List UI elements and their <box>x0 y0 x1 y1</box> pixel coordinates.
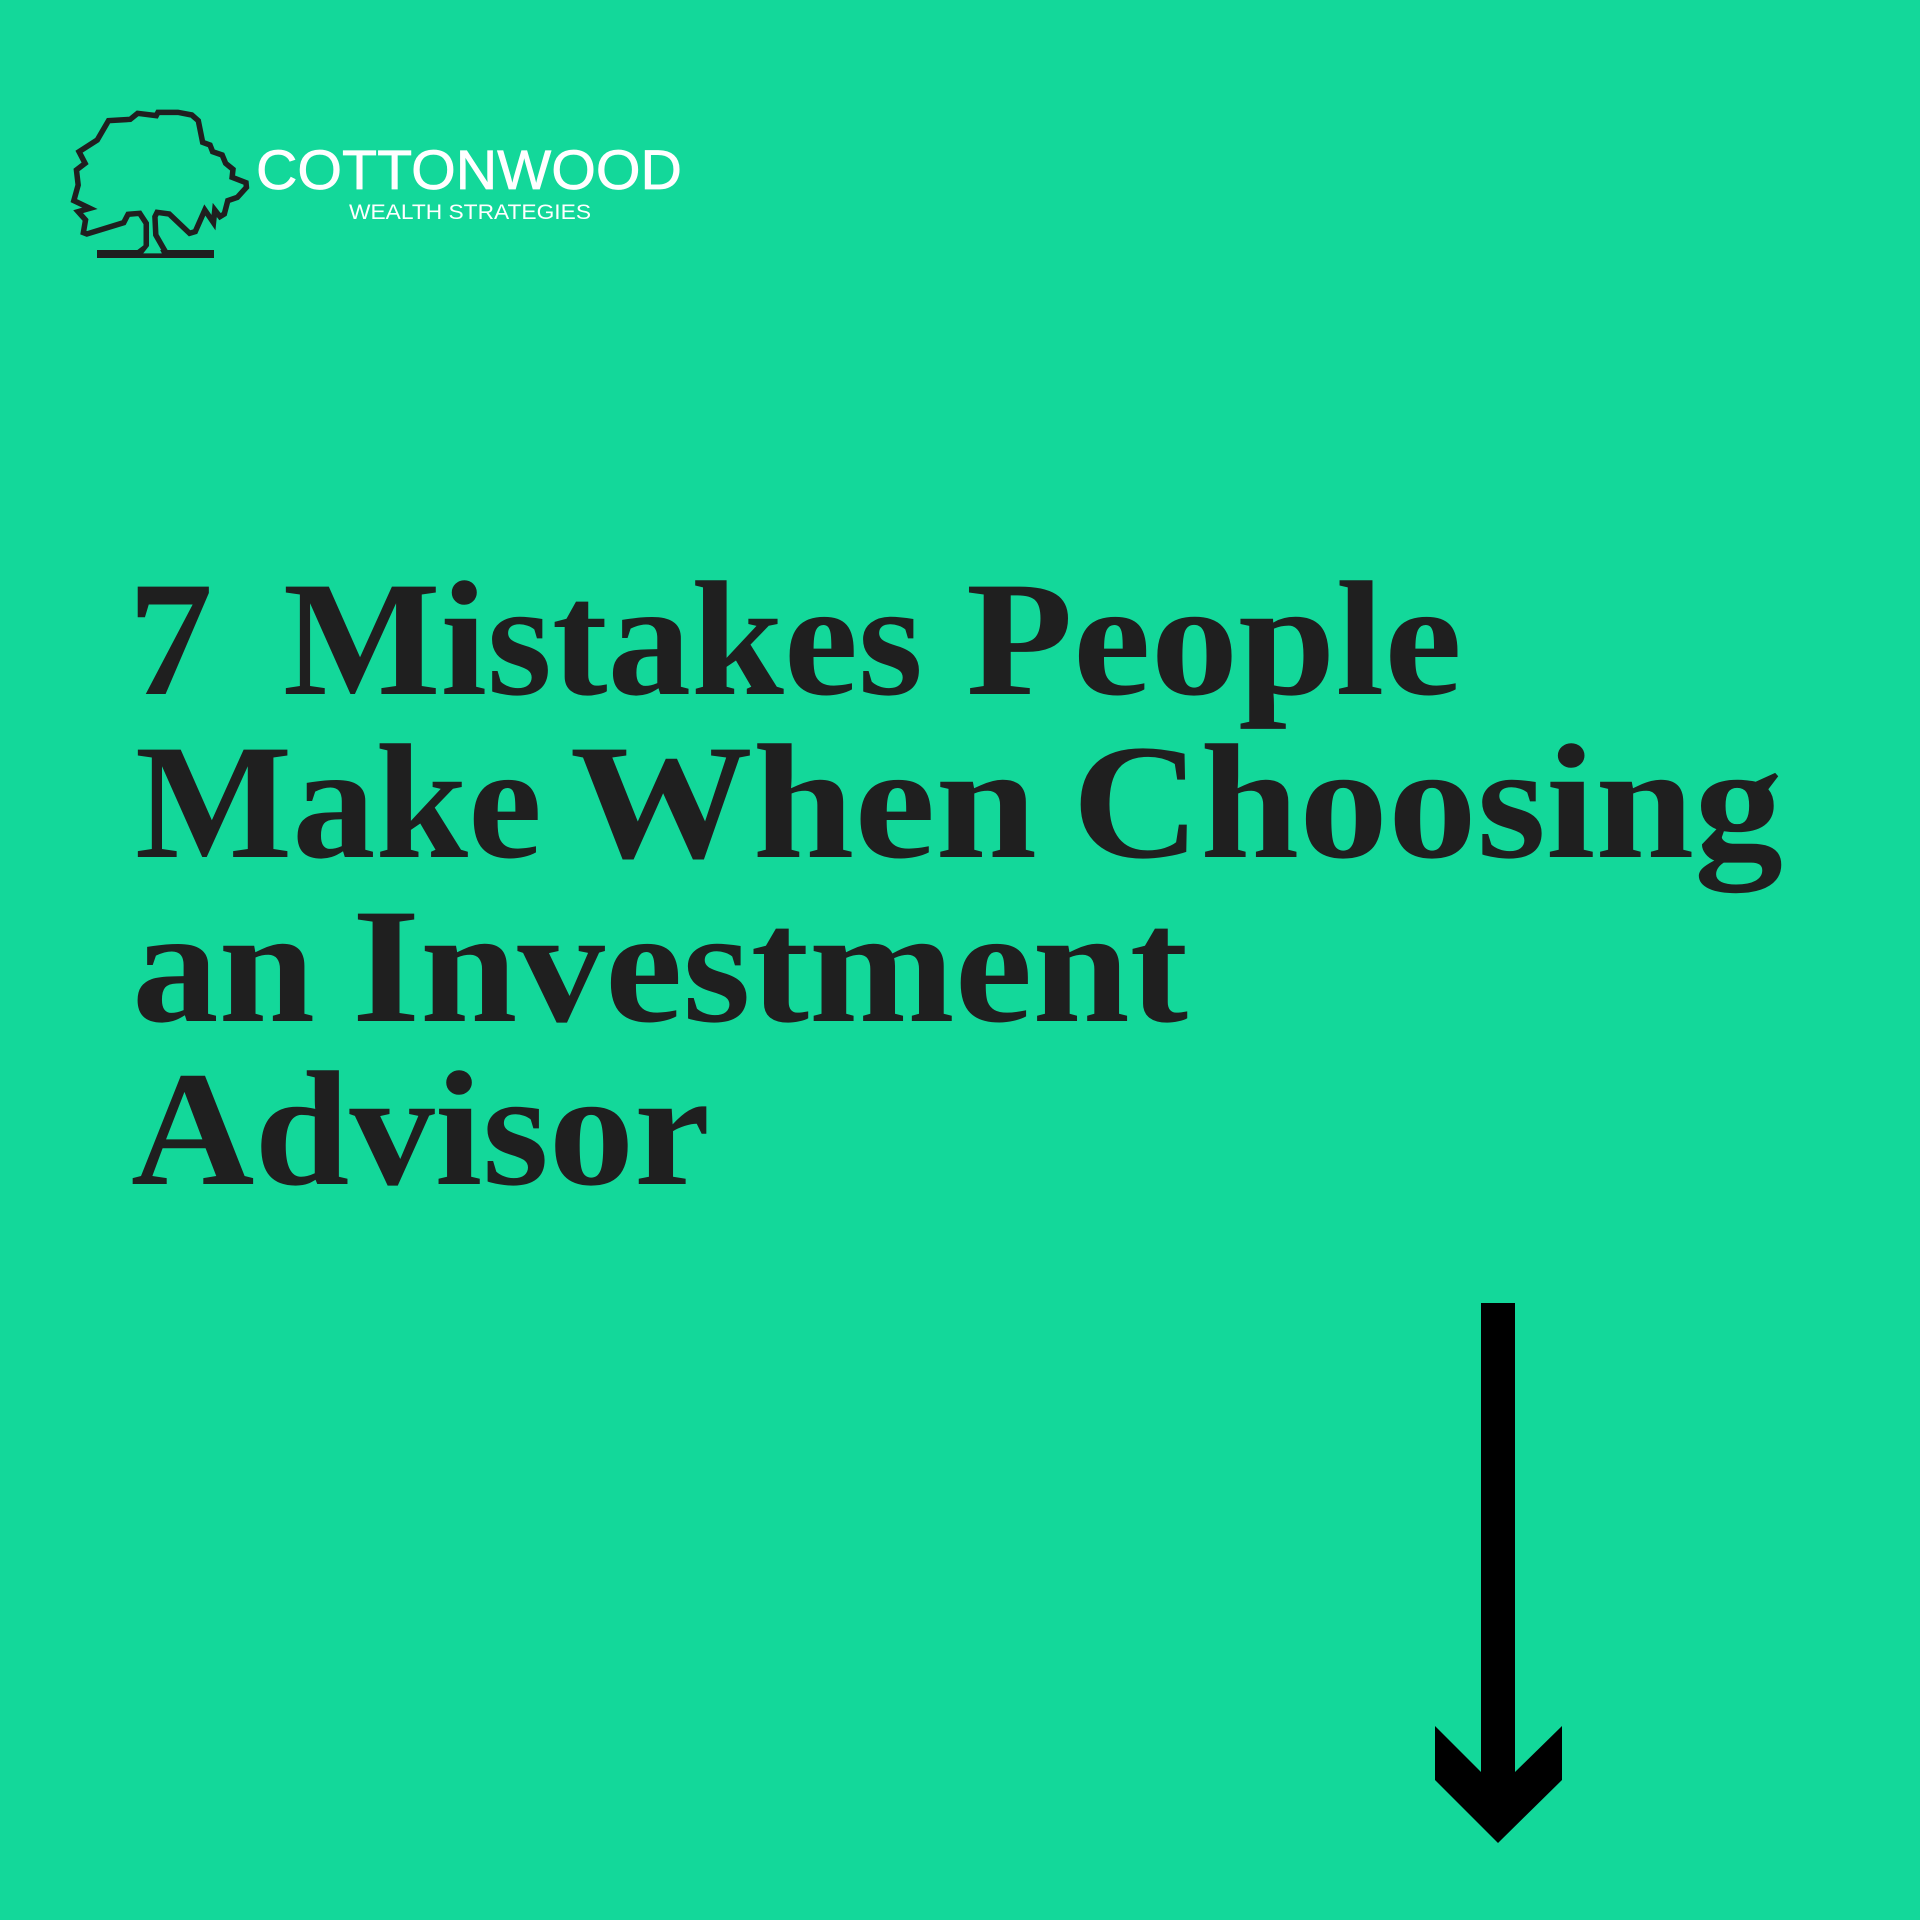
logo tagline: WEALTH STRATEGIES <box>349 201 591 224</box>
title: Investment <box>352 876 1188 1057</box>
title: Mistakes <box>283 549 923 730</box>
title: People <box>966 549 1462 730</box>
icon: tree outline <box>74 112 246 258</box>
title: Choosing <box>1072 712 1783 893</box>
logo wordmark: COTTONWOOD <box>256 138 682 201</box>
arrow pointing down <box>1435 1303 1562 1843</box>
logo: Cottonwood Wealth Strategies <box>74 112 682 258</box>
title: an <box>132 876 315 1057</box>
title <box>128 549 1783 1220</box>
title: 7 <box>128 549 213 730</box>
title: Advisor <box>131 1039 710 1220</box>
title: Make <box>135 712 542 893</box>
title: When <box>570 712 1037 893</box>
